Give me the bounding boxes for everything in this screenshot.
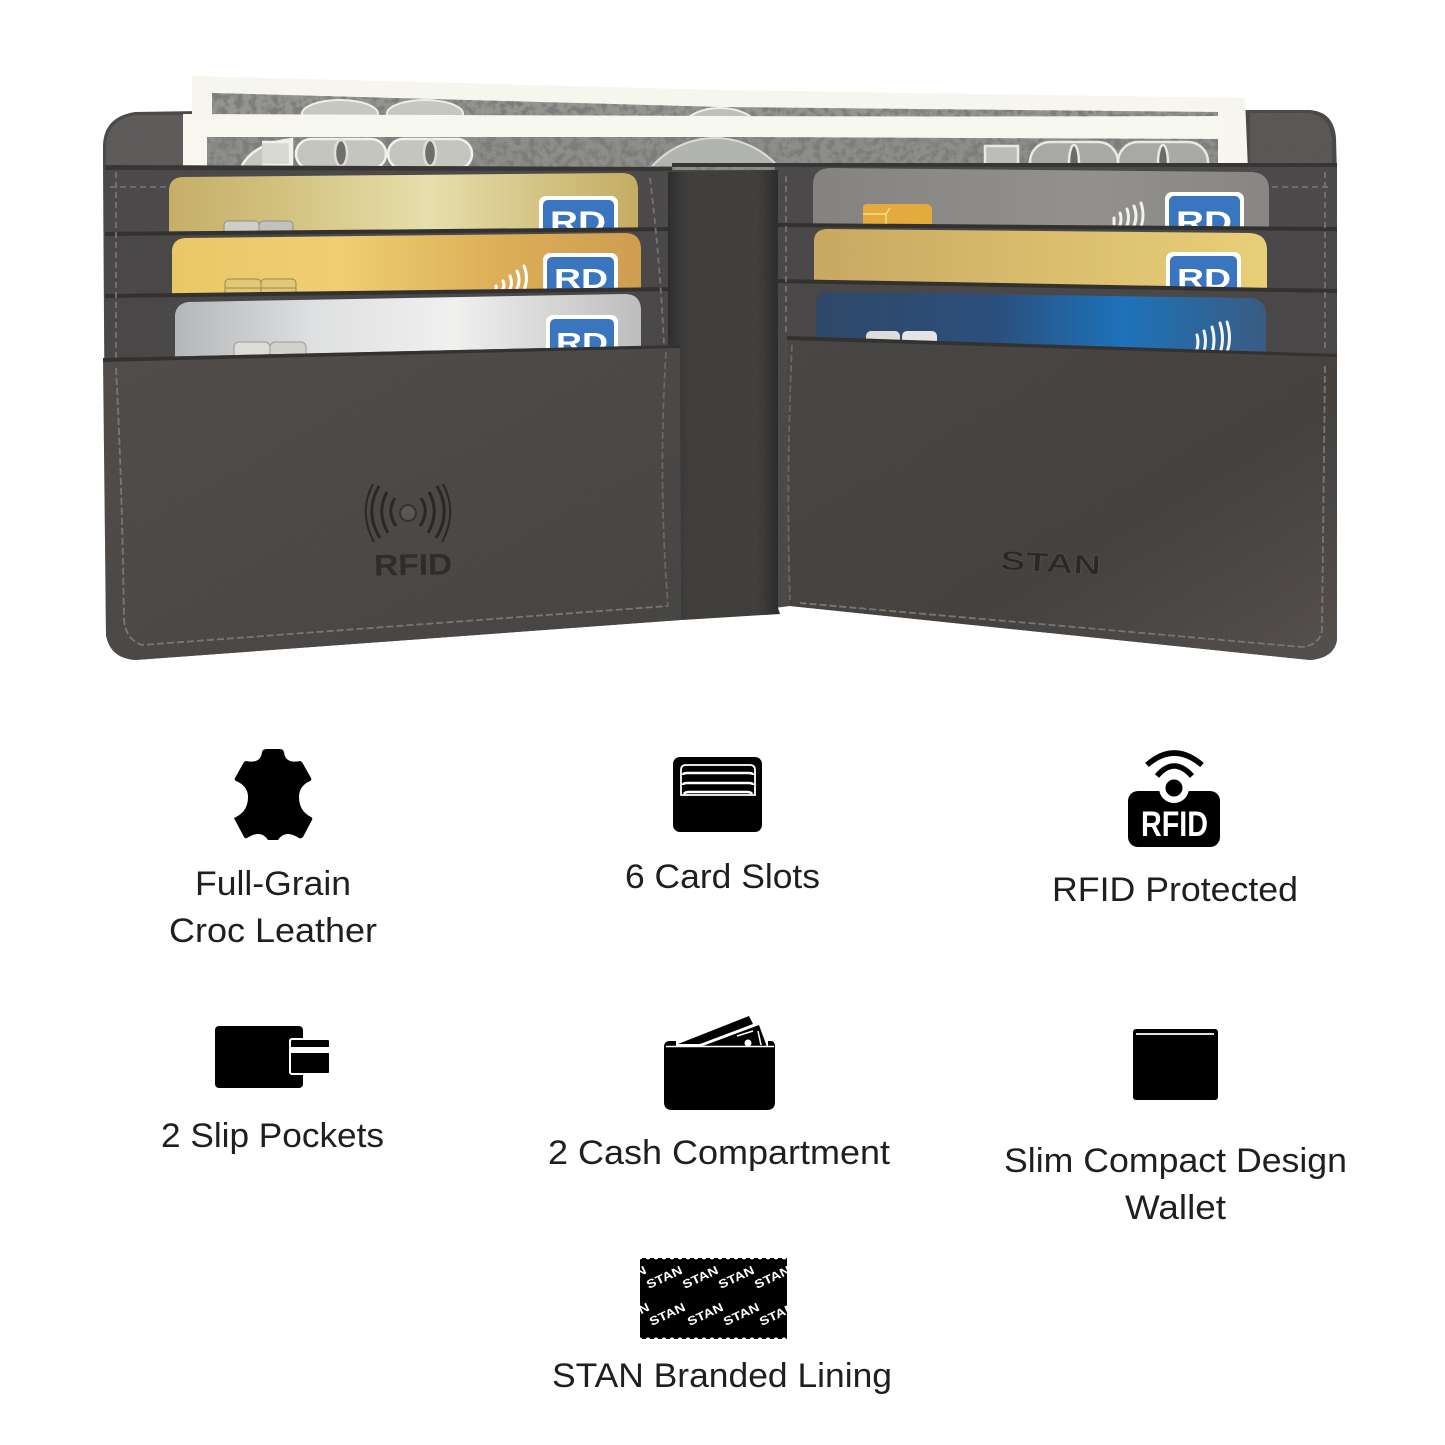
card: sand gold — [814, 229, 1267, 294]
label: Slim Compact Design Wallet — [1004, 1142, 1347, 1227]
icon: leather hide — [234, 749, 312, 840]
contactless icon — [496, 266, 526, 290]
icon: RFID signal tag — [1128, 753, 1220, 847]
back bill numerals — [301, 99, 752, 116]
stitching: right slots — [786, 172, 1332, 352]
icon: branded lining swatch — [640, 1258, 787, 1339]
front banknote — [183, 114, 1218, 170]
icon: wallet with card — [215, 1026, 330, 1088]
label: Slim Compact Design Wallet: Slim Compact Design — [1004, 1142, 1347, 1180]
infographic: wallet with feature icons — [103, 76, 1345, 1394]
numerals 100 left — [240, 139, 472, 170]
RD logo: RD — [1176, 206, 1232, 239]
stitching: left slots — [110, 172, 664, 358]
RD logo — [546, 315, 618, 358]
left front pocket — [103, 345, 681, 660]
icon: branded lining swatch: STAN — [644, 1263, 684, 1292]
feature: STAN Branded Lining — [552, 1257, 892, 1395]
numerals 100 right — [984, 140, 1210, 163]
contactless icon — [1114, 203, 1143, 227]
icon: wallet with banknotes — [664, 1016, 775, 1110]
label: Full-Grain Croc Leather — [169, 865, 377, 950]
feature: Slim Compact Design Wallet — [1004, 1029, 1347, 1227]
label: Full-Grain Croc Leather: Full-Grain — [195, 865, 351, 903]
feature: Full-Grain Croc Leather — [169, 749, 377, 950]
emboss: RFID mark — [366, 484, 452, 583]
card: graphite — [813, 168, 1269, 239]
icon: branded lining swatch: STAN — [752, 1263, 792, 1292]
icon: RFID signal tag: RFID — [1141, 805, 1208, 844]
icon: branded lining swatch: STAN — [611, 1300, 651, 1329]
icon: slim wallet — [1133, 1029, 1218, 1100]
chip — [863, 204, 932, 224]
portrait oval — [651, 137, 776, 166]
icon: branded lining swatch: STAN — [716, 1263, 756, 1292]
RD logo — [543, 253, 618, 294]
RD logo — [1165, 192, 1244, 239]
icon: card slots — [673, 757, 762, 832]
label: RFID Protected: RFID Protected — [1052, 871, 1298, 909]
RD logo — [539, 196, 618, 239]
right front pocket — [787, 336, 1337, 660]
feature: RFID Protected — [1052, 753, 1298, 909]
contactless icon — [1197, 322, 1230, 353]
feature: 2 Cash Compartment — [548, 1016, 891, 1172]
icon: branded lining swatch: STAN — [721, 1300, 761, 1329]
label: STAN Branded Lining: STAN Branded Lining — [552, 1357, 892, 1395]
feature: 2 Slip Pockets — [161, 1026, 384, 1155]
icon: branded lining swatch: STAN — [757, 1300, 797, 1329]
feature: 6 Card Slots — [625, 757, 820, 896]
wallet photo — [103, 76, 1337, 660]
emboss: STAN logo: STAN — [999, 545, 1102, 581]
emboss: RFID mark: RFID — [374, 548, 452, 583]
label: Full-Grain Croc Leather: Croc Leather — [169, 912, 377, 950]
label: 2 Slip Pockets: 2 Slip Pockets — [161, 1117, 384, 1155]
card: blue — [816, 292, 1266, 356]
icon: branded lining swatch: STAN — [647, 1300, 687, 1329]
banknotes — [183, 76, 1248, 170]
card: silver — [175, 294, 641, 362]
icon: branded lining swatch: STAN — [680, 1263, 720, 1292]
RD logo: RD — [556, 327, 608, 358]
back banknote — [192, 76, 1248, 172]
right card slots — [672, 163, 1337, 356]
back leather panel — [103, 110, 1337, 660]
centre spine — [668, 170, 780, 620]
label: Slim Compact Design Wallet: Wallet — [1125, 1189, 1227, 1227]
RD logo — [1166, 252, 1241, 294]
card: gold — [172, 233, 641, 297]
label: 6 Card Slots: 6 Card Slots — [625, 858, 820, 896]
card: pale gold — [169, 173, 638, 239]
label: 2 Cash Compartment: 2 Cash Compartment — [548, 1134, 891, 1172]
RD logo: RD — [554, 263, 608, 294]
icon: branded lining swatch: STAN — [608, 1263, 648, 1292]
RD logo: RD — [1177, 263, 1231, 294]
RD logo: RD — [550, 206, 606, 239]
icon: branded lining swatch: STAN — [685, 1300, 725, 1329]
left card slots — [105, 165, 672, 362]
